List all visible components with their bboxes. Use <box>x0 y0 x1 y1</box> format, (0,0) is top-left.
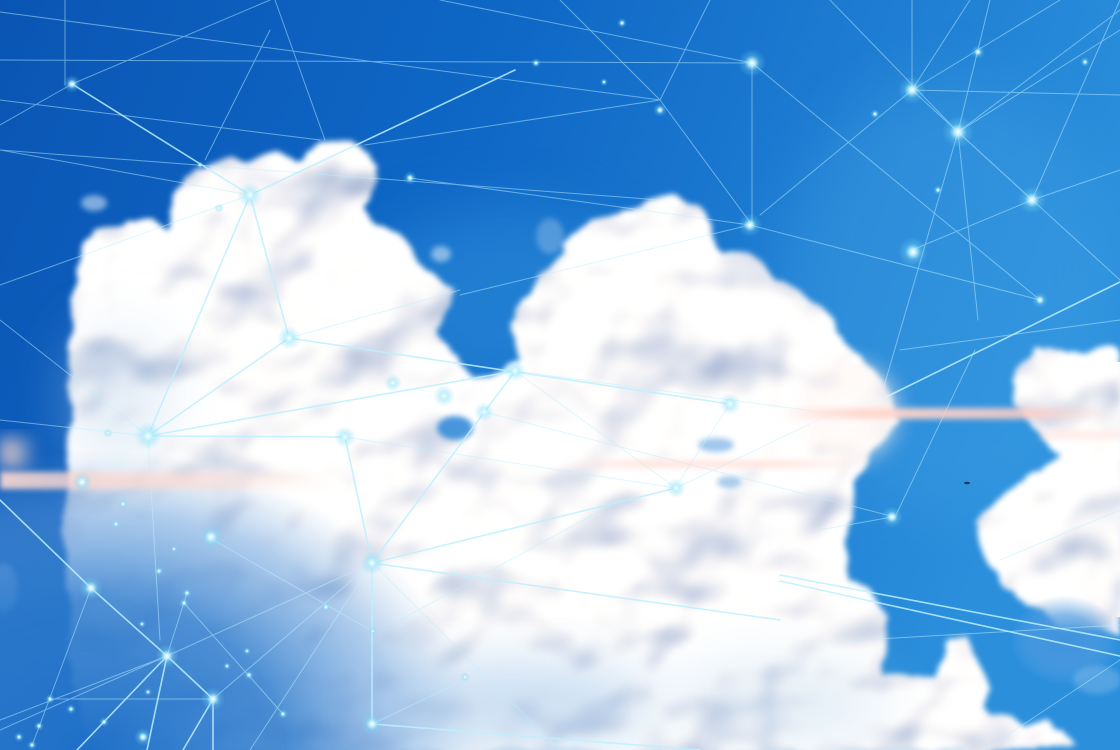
right cloud edge fill <box>1100 362 1120 617</box>
small cloud wisps <box>0 195 1120 694</box>
right cloud base fade <box>1010 595 1120 685</box>
lens flares <box>0 352 1120 489</box>
blue sky gaps in cloud <box>437 416 741 488</box>
lower-left blue fade <box>0 450 480 750</box>
main cloud mass <box>66 140 1078 750</box>
cloud base under texture <box>105 722 985 750</box>
right cloud <box>973 345 1120 635</box>
distant bird <box>964 482 970 484</box>
cloud shading <box>75 330 890 745</box>
